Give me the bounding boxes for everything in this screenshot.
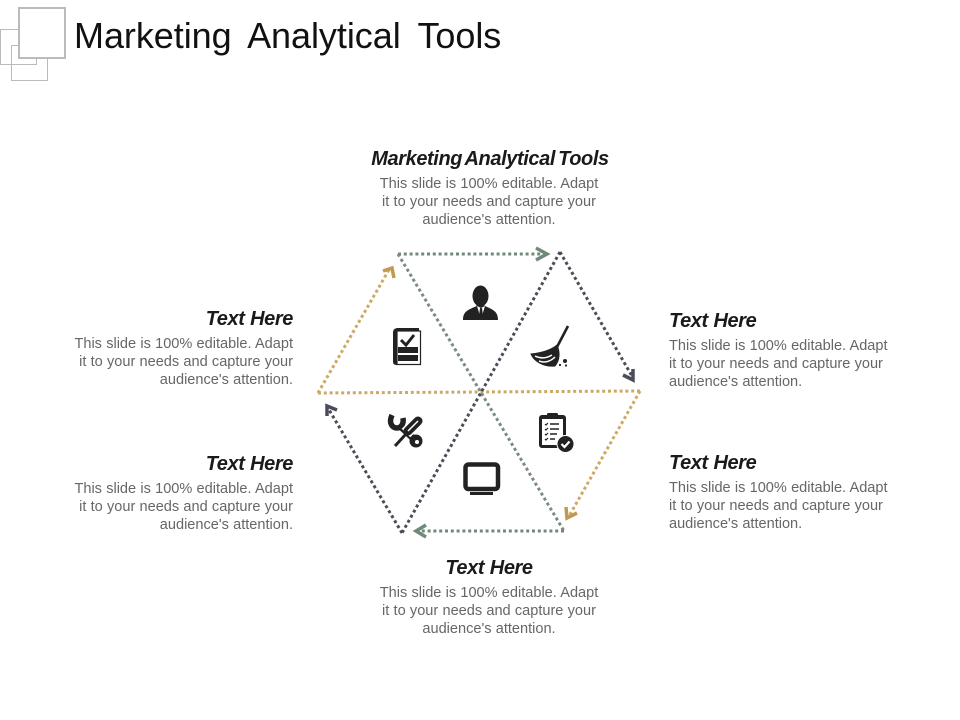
text block: lower left: audience's attention. xyxy=(160,517,293,533)
icon: tools xyxy=(391,415,422,448)
text block: bottom: it to your needs and capture your xyxy=(382,603,596,619)
text block: upper right: This slide is 100% editable. Adapt xyxy=(669,338,888,354)
green dotted paths and arrows xyxy=(398,248,564,537)
text block: upper right: it to your needs and capture your xyxy=(669,356,883,372)
title: Marketing Analytical Tools xyxy=(74,15,501,56)
text block: top: it to your needs and capture your xyxy=(382,194,596,210)
text block: lower right: it to your needs and capture your xyxy=(669,498,883,514)
text block: lower left xyxy=(74,453,293,533)
icon: checklist book xyxy=(393,328,420,365)
text block: lower right: This slide is 100% editable. Adapt xyxy=(669,480,888,496)
text block: upper left xyxy=(74,308,293,388)
text block: lower left: it to your needs and capture your xyxy=(79,499,293,515)
text block: upper right: audience's attention. xyxy=(669,374,802,390)
text block: upper left: This slide is 100% editable. Adapt xyxy=(74,336,293,352)
text block: top: Marketing Analytical Tools xyxy=(371,148,609,170)
text block: bottom: This slide is 100% editable. Adapt xyxy=(380,585,598,601)
text block: upper right xyxy=(669,310,888,390)
dark dotted paths and arrows xyxy=(327,252,633,533)
text block: upper left: audience's attention. xyxy=(160,372,293,388)
text block: lower left: Text Here xyxy=(206,453,293,475)
text block: lower right xyxy=(669,452,888,532)
text block: lower right: audience's attention. xyxy=(669,516,802,532)
text block: bottom xyxy=(380,557,598,637)
text block: upper right: Text Here xyxy=(669,310,756,332)
icon: monitor xyxy=(466,464,498,495)
text block: top: This slide is 100% editable. Adapt xyxy=(380,176,598,192)
orange dotted paths and arrows xyxy=(318,268,640,518)
text block: bottom: audience's attention. xyxy=(422,621,556,637)
text block: upper left: Text Here xyxy=(206,308,293,330)
text block: top: audience's attention. xyxy=(422,212,556,228)
icon: person xyxy=(463,286,498,320)
text block: upper left: it to your needs and capture your xyxy=(79,354,293,370)
icon: broom xyxy=(531,326,568,367)
decorative squares logo xyxy=(0,7,66,81)
icon: clipboard with check xyxy=(539,413,574,452)
text block: bottom: Text Here xyxy=(445,557,533,579)
text block: top xyxy=(371,148,609,228)
text block: lower right: Text Here xyxy=(669,452,756,474)
text block: lower left: This slide is 100% editable. Adapt xyxy=(74,481,293,497)
